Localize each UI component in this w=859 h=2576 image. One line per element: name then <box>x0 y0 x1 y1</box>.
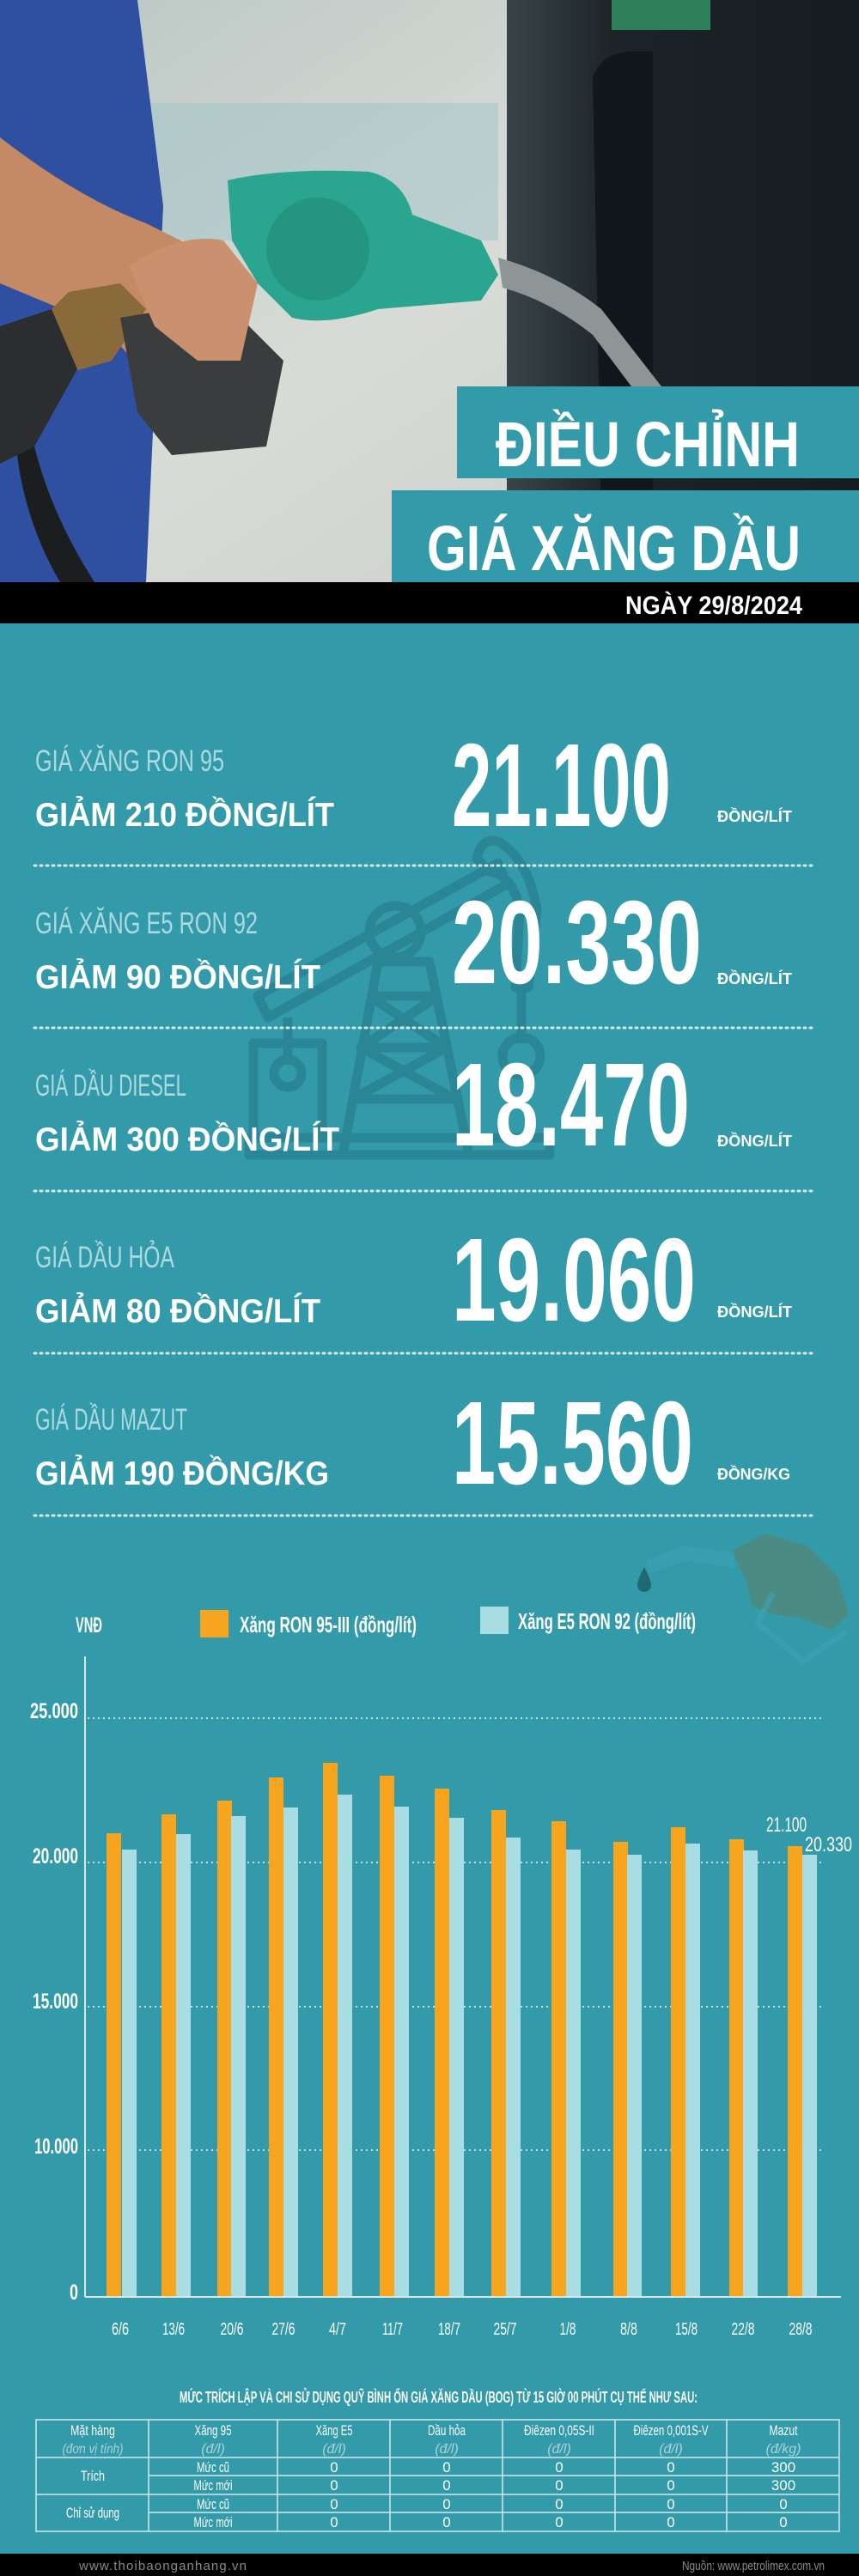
title box: ĐIỀU CHỈNH <box>457 386 859 480</box>
bar chart: 25.000 <box>30 1699 78 1723</box>
bar chart: 21.100 <box>766 1814 807 1837</box>
row 5: mazut: ĐỒNG/KG <box>717 1465 790 1483</box>
table: BOG fund: 0 <box>330 2459 338 2476</box>
table: BOG fund: 0 <box>555 2514 564 2530</box>
bar chart: 8/8 <box>620 2320 637 2339</box>
table: BOG fund: 0 <box>667 2496 675 2512</box>
table: BOG fund: Xăng E5 <box>316 2422 352 2439</box>
row 2: E5 RON 92: GIẢM 90 ĐỒNG/LÍT <box>35 958 320 996</box>
row 3: diesel: ĐỒNG/LÍT <box>717 1132 792 1150</box>
row 2: E5 RON 92: 20.330 <box>452 877 702 1009</box>
table: BOG fund: 0 <box>779 2514 788 2530</box>
row 5: mazut: GIÁ DẦU MAZUT <box>35 1402 187 1437</box>
table: BOG fund: (đ/l) <box>435 2442 459 2457</box>
date bar: NGÀY 29/8/2024 <box>625 591 802 620</box>
table: BOG fund: 0 <box>330 2477 338 2494</box>
footer: Nguồn: www.petrolimex.com.vn <box>682 2559 825 2573</box>
bar chart: 20.000 <box>33 1844 78 1868</box>
bar chart: 28/8 <box>789 2320 813 2339</box>
bar chart: 1/8 <box>560 2320 576 2339</box>
table: BOG fund: 0 <box>667 2459 675 2476</box>
icon: fuel nozzle <box>637 1534 849 1662</box>
table: BOG fund <box>36 2420 839 2531</box>
table: BOG fund: (đ/l) <box>201 2442 225 2457</box>
date bar <box>0 582 859 623</box>
table: BOG fund: 0 <box>442 2477 451 2494</box>
table: BOG fund: Mazut <box>770 2422 798 2439</box>
table: BOG fund: 0 <box>442 2514 451 2530</box>
chart legend <box>76 1607 696 1637</box>
table: BOG fund: 0 <box>442 2496 451 2512</box>
row 3: diesel: GIÁ DẦU DIESEL <box>35 1068 186 1103</box>
bar chart: 13/6 <box>162 2320 185 2339</box>
bar chart: 6/6 <box>112 2320 129 2339</box>
bar chart: 11/7 <box>382 2320 403 2339</box>
row 5: mazut <box>35 1377 790 1510</box>
table: BOG fund: 300 <box>771 2477 795 2494</box>
row 5: mazut: 15.560 <box>452 1377 693 1510</box>
bar chart: 18/7 <box>438 2320 460 2339</box>
chart legend: Xăng RON 95-III (đồng/lít) <box>240 1612 417 1637</box>
table: BOG fund: 0 <box>779 2496 788 2512</box>
bar chart: 10.000 <box>34 2135 78 2159</box>
footer: www.thoibaonganhang.vn <box>78 2559 247 2573</box>
bar chart: 22/8 <box>732 2320 754 2339</box>
table: BOG fund: Trích <box>81 2468 105 2484</box>
row 1: RON 95: GIÁ XĂNG RON 95 <box>35 744 224 778</box>
table: BOG fund: 0 <box>555 2459 564 2476</box>
table: BOG fund: Mặt hàng <box>70 2422 115 2439</box>
icon: oil pumpjack background <box>249 841 550 1155</box>
row 3: diesel <box>35 1039 792 1171</box>
title box: ĐIỀU CHỈNH: ĐIỀU CHỈNH <box>496 409 800 480</box>
bar chart: 25/7 <box>493 2320 517 2339</box>
table: BOG fund: 0 <box>330 2514 338 2530</box>
row 1: RON 95: ĐỒNG/LÍT <box>717 807 792 825</box>
table: BOG fund: (đ/l) <box>659 2442 683 2457</box>
table: BOG fund: 0 <box>667 2514 675 2530</box>
table: BOG fund: 0 <box>555 2477 564 2494</box>
row 4: dầu hỏa: 19.060 <box>452 1214 696 1346</box>
bar chart: 0 <box>70 2281 78 2305</box>
bar chart: 27/6 <box>271 2320 295 2339</box>
table: BOG fund: 0 <box>555 2496 564 2512</box>
row 3: diesel: GIẢM 300 ĐỒNG/LÍT <box>35 1121 339 1158</box>
row 2: E5 RON 92: ĐỒNG/LÍT <box>717 969 792 987</box>
table: BOG fund: Mức mới <box>194 2477 232 2494</box>
table: BOG fund: Mức cũ <box>197 2459 229 2476</box>
table: BOG fund: Điêzen 0,001S-V <box>634 2422 709 2439</box>
table: BOG fund: 0 <box>330 2496 338 2512</box>
table: BOG fund: (đ/kg) <box>766 2442 801 2457</box>
row 4: dầu hỏa: GIẢM 80 ĐỒNG/LÍT <box>35 1292 320 1330</box>
row 1: RON 95: GIẢM 210 ĐỒNG/LÍT <box>35 796 334 834</box>
header photo <box>0 0 859 582</box>
row 1: RON 95: 21.100 <box>452 720 671 852</box>
footer <box>0 2554 859 2576</box>
table: BOG fund: 300 <box>771 2459 795 2476</box>
bar chart: 20/6 <box>220 2320 244 2339</box>
table: BOG fund: Mức cũ <box>197 2496 229 2512</box>
table: BOG fund: 0 <box>442 2459 451 2476</box>
table: BOG fund: Chỉ sử dụng <box>66 2505 119 2521</box>
row 5: mazut: GIẢM 190 ĐỒNG/KG <box>35 1455 329 1492</box>
table: BOG fund: (đơn vị tính) <box>62 2442 124 2457</box>
table: BOG fund: 0 <box>667 2477 675 2494</box>
table: BOG fund: Điêzen 0,05S-II <box>524 2422 594 2439</box>
table: BOG fund: Dầu hỏa <box>428 2422 466 2439</box>
table: BOG fund: Xăng 95 <box>194 2422 232 2439</box>
table: BOG fund: Mức mới <box>194 2514 232 2530</box>
bar chart: 15.000 <box>33 1990 78 2014</box>
chart legend: VNĐ <box>76 1613 102 1637</box>
row 3: diesel: 18.470 <box>452 1039 690 1171</box>
bar chart <box>30 1656 852 2339</box>
row 2: E5 RON 92 <box>35 877 792 1009</box>
row 4: dầu hỏa: GIÁ DẦU HỎA <box>35 1240 174 1274</box>
row 4: dầu hỏa: ĐỒNG/LÍT <box>717 1303 792 1321</box>
row 1: RON 95 <box>35 720 792 852</box>
row 2: E5 RON 92: GIÁ XĂNG E5 RON 92 <box>35 907 258 940</box>
bar chart: 15/8 <box>675 2320 698 2339</box>
table: BOG fund: (đ/l) <box>547 2442 571 2457</box>
bar chart: 4/7 <box>329 2320 346 2339</box>
chart legend: Xăng E5 RON 92 (đồng/lít) <box>518 1608 696 1634</box>
row 4: dầu hỏa <box>35 1214 792 1346</box>
table: BOG fund: (đ/l) <box>322 2442 346 2457</box>
